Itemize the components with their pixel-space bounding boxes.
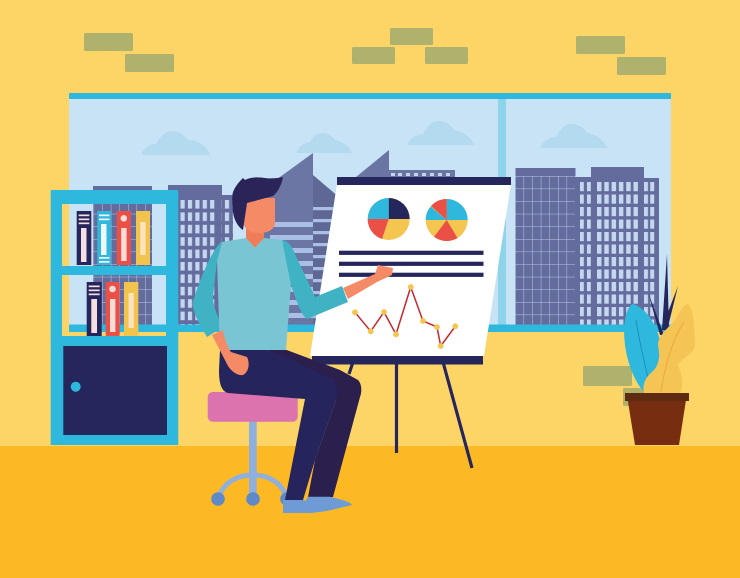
clouds (142, 121, 607, 155)
plant spikes (648, 254, 678, 335)
left sleeve (193, 241, 223, 337)
window sill (69, 324, 671, 332)
line chart (352, 284, 458, 349)
easel legs (349, 362, 472, 468)
board bottom bar (312, 356, 483, 364)
torso (217, 238, 292, 350)
easel (310, 177, 511, 468)
text lines (339, 251, 484, 277)
central tower (262, 153, 313, 325)
right sleeve (282, 240, 348, 319)
neck (246, 225, 264, 248)
wall (0, 0, 740, 446)
front leg and hip (219, 350, 337, 500)
cupboard knob (71, 382, 81, 392)
yellow leaf (643, 304, 695, 393)
left grid building (93, 186, 152, 325)
potted plant (624, 254, 695, 445)
pot rim (625, 393, 689, 401)
left window building (168, 185, 233, 325)
window divider (498, 99, 506, 326)
ear (236, 208, 244, 216)
hair (232, 177, 283, 230)
shelf frame (51, 190, 178, 445)
board sheet (310, 184, 511, 356)
books bottom row (87, 282, 138, 336)
stool base (218, 475, 287, 499)
cupboard door (63, 346, 167, 435)
forearm and hand (343, 265, 393, 299)
floor (0, 446, 740, 578)
hand on knee arm (212, 330, 249, 375)
stool seat (208, 392, 298, 422)
wall bricks (84, 28, 666, 406)
stool (208, 392, 298, 506)
right window building (575, 167, 659, 325)
stool wheels (211, 492, 294, 506)
face (243, 198, 275, 233)
back leg (267, 350, 361, 497)
right grid building (516, 168, 576, 325)
shoes (283, 497, 352, 513)
stool pole (249, 421, 257, 499)
blue leaf vein (636, 320, 649, 382)
yellow leaf vein (661, 322, 684, 392)
bookshelf (51, 190, 178, 445)
pie chart left (368, 198, 410, 240)
man (193, 177, 393, 513)
pot (628, 400, 686, 445)
board top bar (337, 177, 511, 185)
books top row (77, 211, 150, 265)
window (69, 93, 671, 332)
pie chart right (426, 199, 468, 241)
blue leaf (624, 304, 662, 393)
city skyline (93, 150, 659, 325)
far right-centre rooftops (356, 150, 455, 180)
window top frame (69, 93, 671, 99)
window glass (69, 99, 671, 326)
